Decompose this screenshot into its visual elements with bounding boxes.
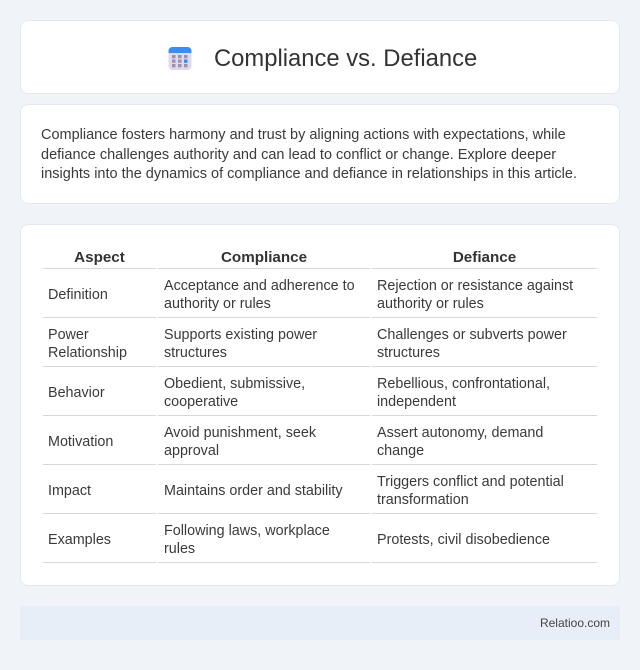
definition defiance [377, 278, 573, 312]
column heading: defiance: Defiance [453, 249, 516, 266]
definition defiance: Rejection or resistance against [377, 278, 573, 294]
intro text: Compliance fosters harmony and trust by aligning actions with expectations, while [41, 127, 566, 143]
behavior defiance: independent [377, 394, 456, 410]
header panel [20, 20, 620, 94]
behavior defiance: Rebellious, confrontational, [377, 376, 550, 392]
intro text: insights into the dynamics of compliance and defiance in relationships in this article. [41, 166, 577, 182]
row: impact: Impact [48, 483, 91, 499]
impact compliance: Maintains order and stability [164, 483, 343, 499]
title: Compliance vs. Defiance [214, 45, 477, 72]
impact defiance: Triggers conflict and potential [377, 474, 564, 490]
impact defiance: transformation [377, 492, 469, 508]
power compliance: Supports existing power [164, 327, 317, 343]
examples defiance: Protests, civil disobedience [377, 532, 550, 548]
impact defiance [377, 474, 564, 508]
motivation compliance: approval [164, 443, 219, 459]
definition compliance: authority or rules [164, 296, 271, 312]
icon: calendar [168, 47, 192, 70]
row: power relationship: Power [48, 327, 89, 343]
motivation defiance: change [377, 443, 424, 459]
intro text [41, 127, 577, 182]
power defiance [377, 327, 567, 361]
behavior defiance [377, 376, 550, 410]
row: power relationship: Relationship [48, 345, 127, 361]
footer text: Relatioo.com [540, 616, 610, 630]
table panel [20, 224, 620, 586]
row: examples: Examples [48, 532, 111, 548]
definition compliance [164, 278, 355, 312]
behavior compliance [164, 376, 305, 410]
footer bar [20, 606, 620, 640]
column heading: aspect: Aspect [74, 249, 125, 266]
examples compliance [164, 523, 330, 557]
row: motivation: Motivation [48, 434, 113, 450]
motivation defiance: Assert autonomy, demand [377, 425, 543, 441]
power compliance: structures [164, 345, 227, 361]
motivation compliance [164, 425, 316, 459]
intro panel [20, 104, 620, 204]
row: behavior: Behavior [48, 385, 105, 401]
examples compliance: rules [164, 541, 195, 557]
definition compliance: Acceptance and adherence to [164, 278, 355, 294]
definition defiance: authority or rules [377, 296, 484, 312]
motivation defiance [377, 425, 543, 459]
power defiance: structures [377, 345, 440, 361]
column heading: compliance: Compliance [221, 249, 307, 266]
row: definition: Definition [48, 287, 108, 303]
intro text: defiance challenges authority and can lead to conflict or change. Explore deeper [41, 146, 556, 162]
power defiance: Challenges or subverts power [377, 327, 567, 343]
behavior compliance: cooperative [164, 394, 238, 410]
behavior compliance: Obedient, submissive, [164, 376, 305, 392]
motivation compliance: Avoid punishment, seek [164, 425, 316, 441]
examples compliance: Following laws, workplace [164, 523, 330, 539]
power compliance [164, 327, 317, 361]
row: power relationship [48, 327, 127, 361]
